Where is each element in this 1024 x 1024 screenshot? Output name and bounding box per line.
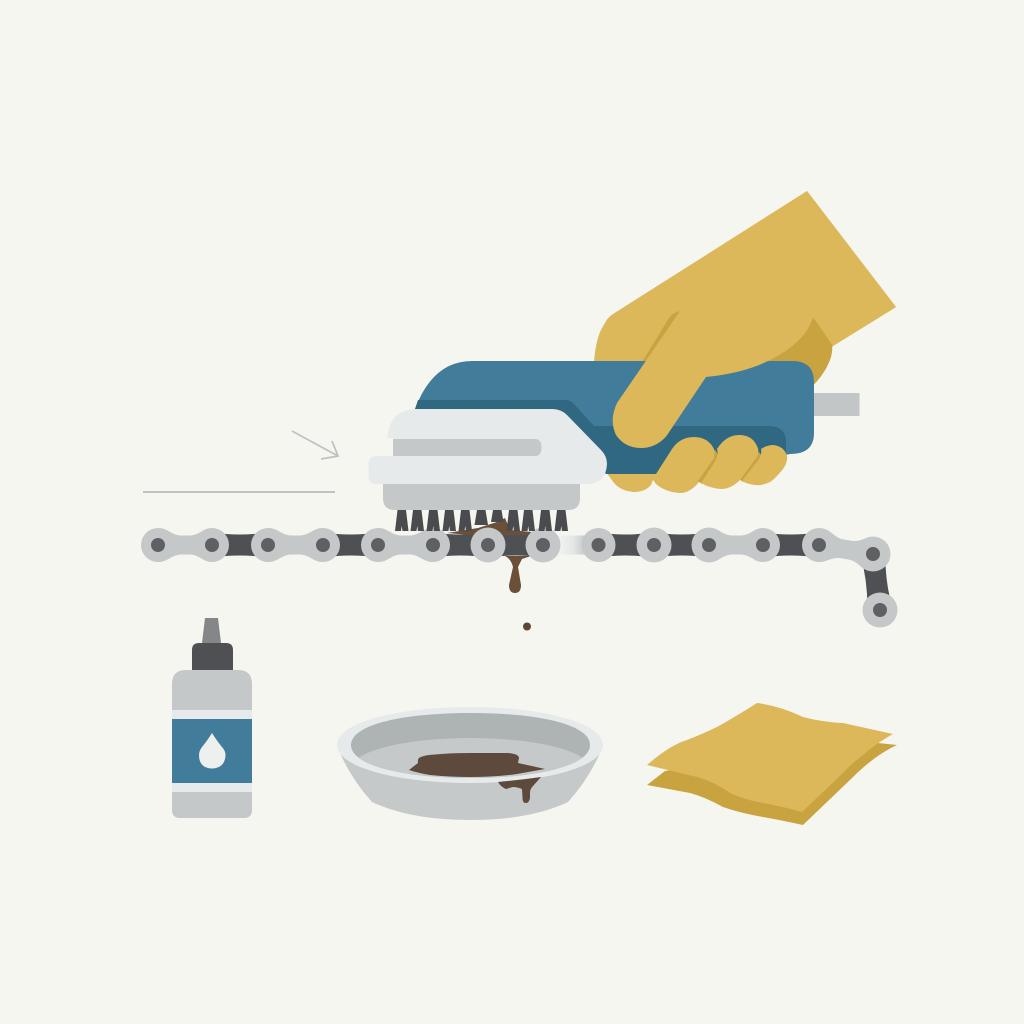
- rim: [337, 707, 603, 783]
- lower layer: [647, 740, 897, 825]
- illustration: brushing a bicycle chain clean: [141, 191, 898, 825]
- finger shadow: [698, 450, 761, 484]
- lower curled finger behind handle: [606, 472, 656, 492]
- bowl of dirty oil: [337, 707, 603, 820]
- cleaned shiny link: [543, 536, 598, 554]
- recessed grip bar: [393, 439, 542, 456]
- hand behind handle: [594, 191, 896, 384]
- curled fingers: [651, 435, 787, 493]
- motion line: [143, 491, 335, 493]
- thumb shadow: [730, 317, 832, 384]
- brush handle: [415, 361, 814, 474]
- bowl interior: [351, 713, 590, 778]
- grime on chain: [447, 518, 532, 593]
- brush cover: [368, 409, 607, 484]
- folded rag: [647, 703, 897, 825]
- roller pins: [151, 538, 887, 617]
- bristle base: [383, 482, 580, 510]
- handle shadow: [415, 400, 786, 474]
- nozzle: [202, 618, 221, 643]
- bottle body: [172, 670, 252, 818]
- arrow: brush direction: [292, 431, 338, 459]
- finger four: [742, 445, 787, 485]
- label stripes: [172, 710, 252, 719]
- finger fold shadow: [642, 311, 680, 365]
- bristles: [395, 510, 568, 531]
- dark inner links: [212, 532, 892, 610]
- icon: water drop: [199, 733, 226, 768]
- bottle of degreaser: [172, 618, 252, 818]
- blue label: [172, 719, 252, 783]
- rollers: [141, 528, 898, 628]
- finger three: [701, 435, 758, 489]
- cap: [192, 643, 233, 670]
- handle body: [415, 361, 814, 474]
- chain: [141, 518, 898, 628]
- finger two: [651, 437, 716, 493]
- bowl floor: [359, 738, 582, 778]
- brush head: [368, 409, 607, 531]
- bowl outer wall: [340, 753, 600, 820]
- top layer: [647, 703, 893, 812]
- palm: [594, 191, 896, 380]
- index finger and upper hand: [613, 191, 896, 448]
- light outer links: [158, 528, 876, 571]
- oil pool: [409, 753, 545, 777]
- falling oil drop: [523, 622, 531, 630]
- oil drip over the rim: [498, 777, 541, 803]
- rod at brush end: [814, 393, 860, 416]
